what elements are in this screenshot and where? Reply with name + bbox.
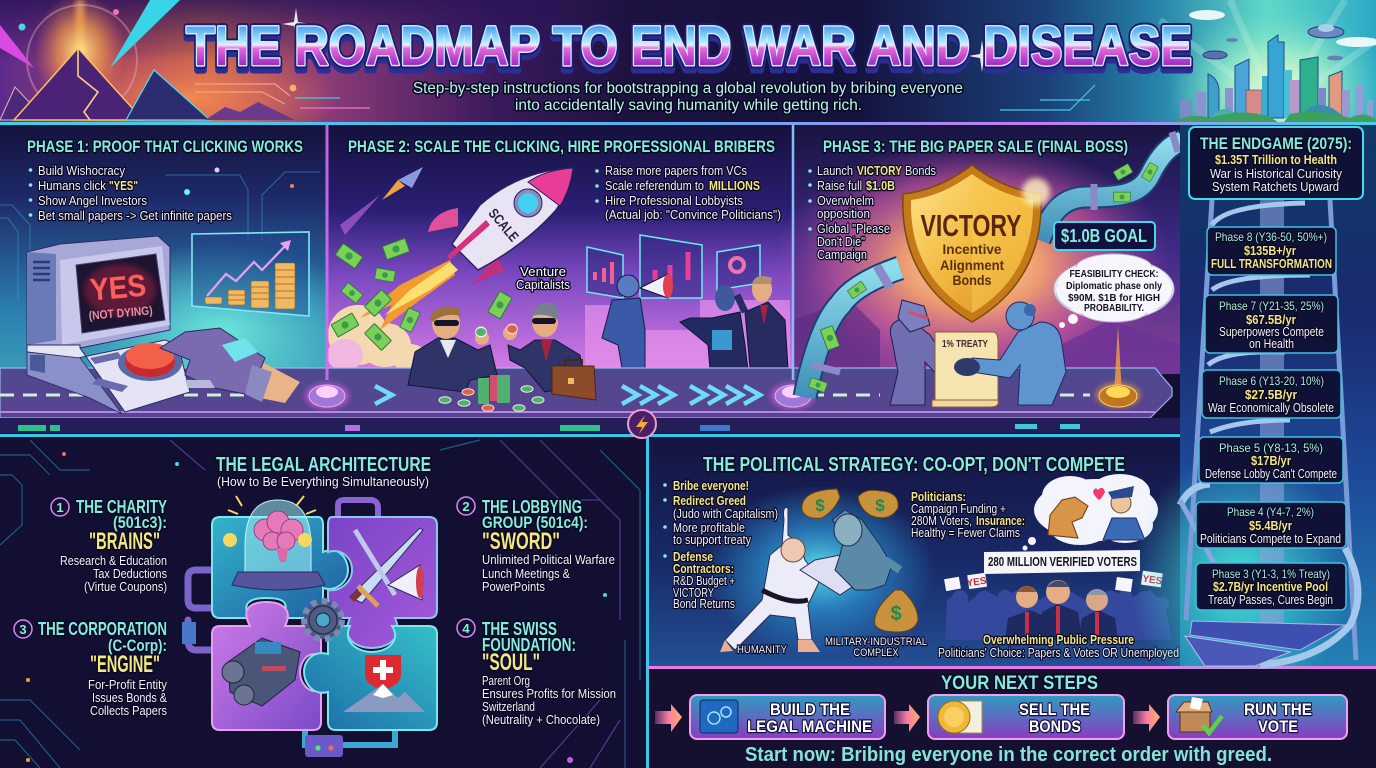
list: phase 1 bullets: Humans click: [38, 178, 106, 193]
list: strategy bullets: Defense: [673, 549, 713, 564]
icon: milestone node one: [305, 383, 349, 409]
box: phase 7: Superpowers Compete: [1219, 324, 1324, 339]
box: the endgame: [1189, 127, 1363, 199]
block: the charity: [51, 497, 167, 594]
heading: phase 3: PHASE 3: THE BIG PAPER SALE (FINAL BOSS): [823, 137, 1128, 156]
block: the swiss foundation: FOUNDATION:: [482, 635, 576, 655]
block: the corporation: "ENGINE": [90, 651, 160, 678]
block: the charity: Research & Education: [60, 553, 167, 568]
subtitle: [413, 80, 963, 114]
list: phase 3 bullets: Don't Die": [817, 234, 865, 249]
box: the endgame: War is Historical Curiosity: [1210, 166, 1342, 181]
block: the swiss foundation: Parent Org: [482, 673, 530, 688]
heading: next steps: YOUR NEXT STEPS: [941, 673, 1098, 694]
block: the corporation: (C-Corp):: [108, 636, 167, 655]
icon: holographic screens: [587, 235, 760, 298]
block: the corporation: 3: [19, 622, 27, 637]
icon: puzzle brains: [212, 496, 348, 618]
box: phase 5: [1199, 437, 1343, 483]
box: the endgame: System Ratchets Upward: [1212, 179, 1339, 194]
button: run the vote: RUN THE: [1244, 700, 1312, 719]
icon: casino chips and briefcase: [439, 360, 596, 411]
figure: investor two: [503, 303, 585, 392]
box: phase 7: Phase 7 (Y21-35, 25%): [1219, 299, 1324, 313]
text: politicians and insurance: Healthy = Fewer Claims: [911, 525, 1020, 540]
list: phase 3 bullets: Raise full: [817, 178, 862, 193]
box: phase 5: $17B/yr: [1251, 453, 1291, 468]
list: phase 1 bullets: Bet small papers -> Get infinite papers: [38, 208, 232, 223]
button: build the legal machine: LEGAL MACHINE: [747, 717, 872, 736]
panel: endgame tower: [1130, 125, 1376, 710]
list: phase 3 bullets: Global "Please: [817, 221, 890, 236]
list: phase 3 bullets: [808, 163, 936, 262]
subtitle: into accidentally saving humanity while getting rich.: [515, 97, 862, 114]
button: run the vote: [1168, 695, 1347, 739]
heading: phase 1: PHASE 1: PROOF THAT CLICKING WORKS: [27, 137, 303, 156]
list: phase 3 bullets: Overwhelm: [817, 193, 874, 208]
list: phase 2 bullets: Hire Professional Lobbyists: [605, 193, 743, 208]
list: phase 2 bullets: Scale referendum to: [605, 178, 704, 193]
sign: voters banner: [984, 550, 1140, 574]
block: the lobbying group: Lunch Meetings &: [482, 566, 570, 581]
block: the corporation: For-Profit Entity: [88, 677, 167, 692]
list: phase 1 bullets: Show Angel Investors: [38, 193, 147, 208]
title: THE ROADMAP TO END WAR AND DISEASE: [186, 19, 1192, 82]
text: politicians and insurance: Campaign Funding +: [911, 501, 1006, 516]
block: the lobbying group: Unlimited Political Warfare: [482, 552, 615, 567]
icon: retro computer: [27, 236, 190, 414]
icon: small rocket: [340, 167, 423, 235]
button: build the legal machine: [690, 695, 885, 739]
icon: rocket with SCALE label: [360, 168, 573, 330]
arrow: to step two: [894, 704, 920, 732]
block: the charity: 1: [56, 500, 64, 515]
icon: future city skyline: [1160, 0, 1376, 175]
header banner: [0, 0, 1376, 175]
block: the lobbying group: PowerPoints: [482, 579, 545, 594]
block: the charity: THE CHARITY: [76, 497, 167, 517]
button: sell the bonds: [928, 695, 1124, 739]
heading: phase 2: PHASE 2: SCALE THE CLICKING, HIRE PROFESSIONAL BRIBERS: [348, 137, 775, 156]
text: public pressure: [938, 632, 1179, 660]
box: phase 7: [1205, 295, 1338, 353]
button: run the vote: VOTE: [1258, 717, 1298, 736]
box: phase 5: Phase 5 (Y8-13, 5%): [1219, 441, 1323, 455]
block: the corporation: [14, 619, 167, 718]
road timeline: [0, 124, 1180, 433]
box: phase 4: [1196, 502, 1346, 548]
list: phase 2 bullets: Raise more papers from VCs: [605, 163, 747, 178]
block: the lobbying group: GROUP (501c4):: [482, 513, 588, 532]
icon: robot with megaphone: [602, 274, 673, 368]
list: strategy bullets: Bribe everyone!: [673, 478, 749, 493]
label: humanity: HUMANITY: [737, 644, 788, 656]
panel: phase 3: [772, 124, 1182, 390]
box: phase 8: [1207, 227, 1336, 275]
label: military-industrial complex: [825, 636, 927, 659]
list: phase 3 bullets: Campaign: [817, 247, 867, 262]
text: incentive alignment bonds: Bonds: [952, 272, 992, 288]
box: phase 6: Phase 6 (Y13-20, 10%): [1219, 374, 1324, 388]
icon: spiral staircase: [1180, 195, 1358, 666]
heading: legal architecture: [216, 454, 431, 489]
icon: milestone node two: [771, 383, 815, 409]
list: phase 3 bullets: $1.0B: [866, 178, 895, 193]
list: strategy bullets: (Judo with Capitalism): [673, 506, 778, 521]
box: phase 8: $135B+/yr: [1244, 243, 1296, 258]
figures: robots shaking hands: [890, 300, 1066, 407]
block: the corporation: Issues Bonds &: [92, 690, 167, 705]
icon: connector pipes: [182, 500, 395, 757]
callout: feasibility check cloud: FEASIBILITY CHECK:: [1070, 268, 1158, 280]
text: incentive alignment bonds: Incentive: [942, 241, 1002, 257]
text: politicians and insurance: Insurance:: [976, 513, 1025, 528]
chart: rising coins: [192, 232, 309, 316]
block: the charity: (501c3):: [113, 513, 167, 532]
label: venture capitalists: Capitalists: [516, 278, 570, 292]
list: phase 2 bullets: MILLIONS: [709, 178, 760, 193]
callout: feasibility check cloud: [1054, 254, 1174, 328]
closing line: Start now: Bribing everyone in the correct order with greed.: [745, 744, 1272, 766]
text: politicians and insurance: [911, 489, 1025, 540]
icon: puzzle swiss flag: [304, 626, 437, 730]
icon: circuit traces: [295, 85, 1095, 110]
list: phase 3 bullets: VICTORY: [857, 163, 902, 178]
box: phase 3 treaty: $2.7B/yr Incentive Pool: [1213, 579, 1328, 594]
figure: politician: [737, 276, 788, 368]
text: public pressure: Overwhelming Public Pressure: [983, 632, 1134, 647]
box: phase 4: Phase 4 (Y4-7, 2%): [1227, 505, 1314, 519]
icon: money bags: $: [875, 496, 885, 515]
button: sell the bonds: BONDS: [1029, 717, 1081, 736]
list: phase 1 bullets: "YES": [109, 178, 138, 193]
figures: crowd and politicians: YES: [1142, 574, 1163, 587]
text: YES: YES: [89, 268, 148, 307]
text: politicians and insurance: Politicians:: [911, 489, 966, 504]
list: phase 2 bullets: [595, 163, 781, 222]
list: strategy bullets: More profitable: [673, 520, 745, 535]
callout: feasibility check cloud: $90M. $1B for HIGH: [1068, 292, 1160, 304]
block: the swiss foundation: "SOUL": [482, 649, 540, 676]
icon: money bags: $: [815, 496, 825, 515]
list: phase 3 bullets: opposition: [817, 206, 870, 221]
list: strategy bullets: Bond Returns: [673, 596, 735, 611]
label: military-industrial complex: COMPLEX: [854, 647, 899, 659]
list: strategy bullets: to support treaty: [673, 532, 751, 547]
icon: smoke cloud: [327, 305, 428, 372]
icon: money bags: $: [890, 603, 902, 625]
callout: dog and officer thought cloud: [1022, 474, 1158, 550]
box: phase 4: $5.4B/yr: [1249, 518, 1292, 533]
icon: progress chevrons: [375, 386, 760, 404]
list: phase 3 bullets: Launch: [817, 163, 853, 178]
title: THE ROADMAP TO END WAR AND DISEASE: [186, 14, 1192, 77]
icon: robotic hand: [160, 328, 300, 403]
panel: phase 2: [327, 124, 793, 374]
box: phase 7: on Health: [1249, 336, 1294, 351]
figures: crowd and politicians: YES: [966, 576, 988, 589]
block: the swiss foundation: 4: [462, 621, 470, 636]
icon: lightning badge: [628, 410, 656, 438]
block: the corporation: THE CORPORATION: [38, 619, 167, 639]
icon: flying money: [331, 238, 512, 350]
list: strategy bullets: [663, 478, 778, 611]
panel: your next steps: [649, 669, 1376, 768]
box: phase 3 treaty: [1196, 563, 1346, 610]
box: phase 3 treaty: Phase 3 (Y1-3, 1% Treaty): [1212, 567, 1330, 581]
label: venture capitalists: [516, 265, 570, 292]
callout: goal: $1.0B GOAL: [1061, 226, 1147, 246]
box: phase 8: FULL TRANSFORMATION: [1211, 256, 1332, 271]
button: build the legal machine: BUILD THE: [770, 700, 850, 719]
box: phase 6: [1202, 370, 1341, 418]
list: phase 1 bullets: Build Wishocracy: [38, 163, 125, 178]
heading: political strategy: THE POLITICAL STRATEGY: CO-OPT, DON'T COMPETE: [703, 454, 1125, 476]
callout: feasibility check cloud: Diplomatic phase only: [1066, 280, 1162, 292]
icon: money bags: [802, 489, 918, 632]
icon: milestone node gold: [1096, 325, 1140, 407]
text: treaty scroll title: 1% TREATY: [942, 338, 988, 350]
icon: money pipes: [1040, 132, 1182, 240]
text: VICTORY: VICTORY: [920, 208, 1022, 243]
label: venture capitalists: Venture: [520, 265, 566, 279]
text: incentive alignment bonds: Alignment: [940, 257, 1004, 273]
block: the lobbying group: 2: [462, 499, 470, 514]
panel: legal architecture: [0, 440, 640, 768]
list: strategy bullets: Redirect Greed: [673, 493, 746, 508]
box: phase 3 treaty: Treaty Passes, Cures Begin: [1208, 592, 1333, 607]
icon: money pipe lower: [805, 266, 900, 397]
panel: political strategy: [649, 437, 1180, 666]
box: phase 6: $27.5B/yr: [1245, 387, 1297, 402]
label: military-industrial complex: MILITARY-INDUSTRIAL: [825, 636, 927, 648]
block: the swiss foundation: (Neutrality + Chocolate): [482, 712, 600, 727]
block: the swiss foundation: THE SWISS: [482, 619, 557, 639]
text: public pressure: Politicians' Choice: Papers & Votes OR Unemployed: [938, 645, 1179, 660]
icon: glowing mountains: [0, 0, 296, 120]
icon: puzzle sword: [328, 517, 437, 648]
text: incentive alignment bonds: [940, 241, 1004, 288]
block: the charity: (Virtue Coupons): [84, 579, 167, 594]
text: not dying: (NOT DYING): [88, 303, 153, 323]
button: sell the bonds: SELL THE: [1019, 700, 1090, 719]
panel: phase 1: [0, 124, 330, 375]
list: strategy bullets: VICTORY: [673, 585, 714, 600]
icon: central gear: [304, 601, 342, 639]
block: the charity: Tax Deductions: [93, 566, 167, 581]
block: the lobbying group: [457, 497, 615, 594]
block: the lobbying group: "SWORD": [482, 528, 560, 555]
box: the endgame: $1.35T Trillion to Health: [1215, 152, 1337, 167]
text: politicians and insurance: 280M Voters,: [911, 513, 972, 528]
figure: lobbyist robot: [680, 285, 748, 370]
list: phase 1 bullets: [29, 163, 232, 223]
icon: puzzle engine: [212, 602, 321, 730]
box: phase 6: War Economically Obsolete: [1208, 400, 1334, 415]
list: phase 2 bullets: (Actual job: "Convince Politicians"): [605, 207, 781, 222]
arrow: to step one: [655, 704, 682, 732]
subtitle: Step-by-step instructions for bootstrapping a global revolution by bribing everyone: [413, 80, 963, 97]
box: phase 8: Phase 8 (Y36-50, 50%+): [1215, 230, 1327, 244]
figure: armored complex: [832, 510, 900, 590]
callout: feasibility check cloud: PROBABILITY.: [1084, 302, 1144, 314]
figures: crowd and politicians: [944, 571, 1172, 640]
icon: sparkles: [282, 8, 996, 72]
list: strategy bullets: R&D Budget +: [673, 573, 735, 588]
block: the swiss foundation: [457, 619, 616, 727]
heading: legal architecture: THE LEGAL ARCHITECTURE: [216, 454, 431, 476]
arrow: to step three: [1133, 704, 1160, 732]
list: phase 3 bullets: Bonds: [905, 163, 936, 178]
box: phase 4: Politicians Compete to Expand: [1200, 531, 1341, 546]
block: the lobbying group: THE LOBBYING: [482, 497, 582, 517]
callout: goal: [1054, 222, 1155, 250]
figure: judo fighter humanity: [720, 508, 870, 652]
title: THE ROADMAP TO END WAR AND DISEASE: [186, 14, 1192, 77]
heading: legal architecture: (How to Be Everything Simultaneously): [217, 474, 429, 489]
block: the swiss foundation: Switzerland: [482, 699, 535, 714]
figure: investor one: [408, 307, 497, 392]
sign: voters banner: 280 MILLION VERIFIED VOTERS: [988, 554, 1137, 569]
block: the swiss foundation: Ensures Profits for Mission: [482, 686, 616, 701]
list: strategy bullets: Contractors:: [673, 561, 734, 576]
block: the charity: "BRAINS": [89, 528, 160, 555]
icon: victory shield: [903, 165, 1050, 322]
text: SCALE on rocket: SCALE: [485, 205, 522, 244]
box: phase 7: $67.5B/yr: [1246, 312, 1296, 327]
block: the corporation: Collects Papers: [90, 703, 167, 718]
